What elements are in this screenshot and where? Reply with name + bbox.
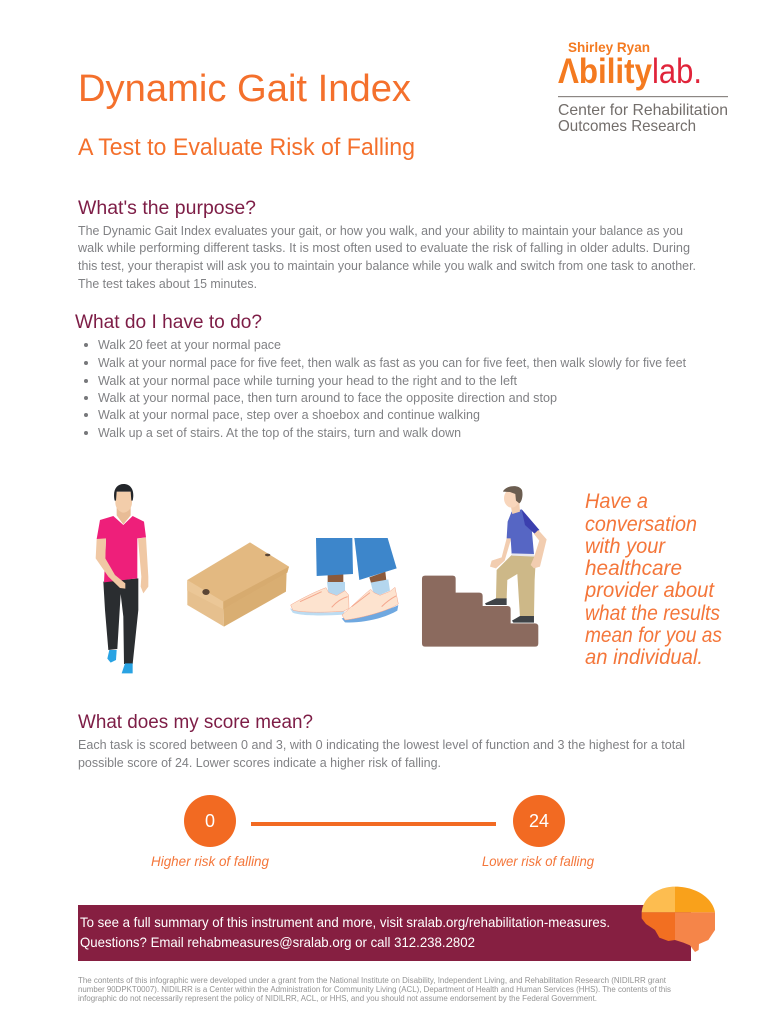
callout xyxy=(584,490,722,669)
icon: stairs xyxy=(422,576,538,647)
icon: brain xyxy=(642,887,715,952)
footer note: number 90DPKT0007). NIDILRR is a Center within the Administration for Community Living (ACL), Department of Health and Human Services (HHS). The contents of this xyxy=(78,985,671,994)
title: Dynamic Gait Index xyxy=(78,68,411,110)
callout: an individual. xyxy=(585,646,703,669)
footer note: The contents of this infographic were developed under a grant from the National Institute on Disability, Independent Living, and Rehabilitation Research (NIDILRR grant xyxy=(78,976,667,985)
logo xyxy=(558,39,728,135)
subtitle: A Test to Evaluate Risk of Falling xyxy=(78,134,415,161)
text block: purpose: walk while performing different tasks. It is most often used to evaluate the risk of falling in older adults. During xyxy=(77,241,690,255)
icon: man climbing stairs xyxy=(485,486,547,623)
task list: Walk at your normal pace, step over a shoebox and continue walking xyxy=(98,408,480,422)
text block: purpose: The test takes about 15 minutes. xyxy=(78,277,257,291)
logo: Λbility xyxy=(558,52,652,91)
score scale: Lower risk of falling xyxy=(482,853,594,869)
heading: score: What does my score mean? xyxy=(78,712,313,733)
logo: lab. xyxy=(652,52,702,91)
text block: score xyxy=(78,738,685,770)
text block: score: Each task is scored between 0 and 3, with 0 indicating the lowest level of function and 3 the highest for a total xyxy=(78,738,685,752)
task list: Walk up a set of stairs. At the top of the stairs, turn and walk down xyxy=(98,426,461,440)
footer note: infographic do not necessarily represent the policy of NIDILRR, ACL, or HHS, and you should not assume endorsement by the Federal Government. xyxy=(78,994,597,1003)
text block: purpose xyxy=(77,224,696,291)
logo: Shirley Ryan xyxy=(568,39,650,55)
heading: purpose: What's the purpose? xyxy=(78,198,256,219)
task list: Walk at your normal pace while turning your head to the right and to the left xyxy=(98,374,518,388)
icon: shoebox xyxy=(187,542,289,627)
logo: Outcomes Research xyxy=(558,118,696,135)
task list: Walk at your normal pace for five feet, then walk as fast as you can for five feet, then walk slowly for five feet xyxy=(98,356,687,370)
logo: Center for Rehabilitation xyxy=(558,102,728,119)
task list xyxy=(84,338,687,440)
icon: walking man xyxy=(96,484,148,673)
heading: what to do: What do I have to do? xyxy=(75,312,262,333)
banner: Questions? Email rehabmeasures@sralab.org or call 312.238.2802 xyxy=(80,934,475,950)
callout: healthcare xyxy=(585,557,682,580)
footer note xyxy=(78,976,671,1003)
text block: purpose: this test, your therapist will ask you to maintain your balance while you walk and switch from one task to another. xyxy=(78,259,696,273)
banner: To see a full summary of this instrument and more, visit sralab.org/rehabilitation-measures. xyxy=(80,914,610,930)
task list: Walk 20 feet at your normal pace xyxy=(98,338,281,352)
text block: score: possible score of 24. Lower scores indicate a higher risk of falling. xyxy=(78,756,441,770)
score scale: Higher risk of falling xyxy=(151,853,269,869)
banner xyxy=(78,905,691,961)
score scale xyxy=(151,795,594,869)
task list: Walk at your normal pace, then turn around to face the opposite direction and stop xyxy=(98,391,557,405)
callout: mean for you as xyxy=(585,624,722,647)
icon: feet in sneakers xyxy=(290,538,398,622)
callout: what the results xyxy=(585,602,720,625)
score scale: 24 xyxy=(529,811,549,831)
callout: provider about xyxy=(584,579,715,602)
callout: Have a xyxy=(585,490,648,513)
callout: conversation xyxy=(585,513,697,536)
score scale: 0 xyxy=(205,811,215,831)
callout: with your xyxy=(585,535,666,558)
text block: purpose: The Dynamic Gait Index evaluates your gait, or how you walk, and your ability to maintain your balance as you xyxy=(78,224,683,238)
